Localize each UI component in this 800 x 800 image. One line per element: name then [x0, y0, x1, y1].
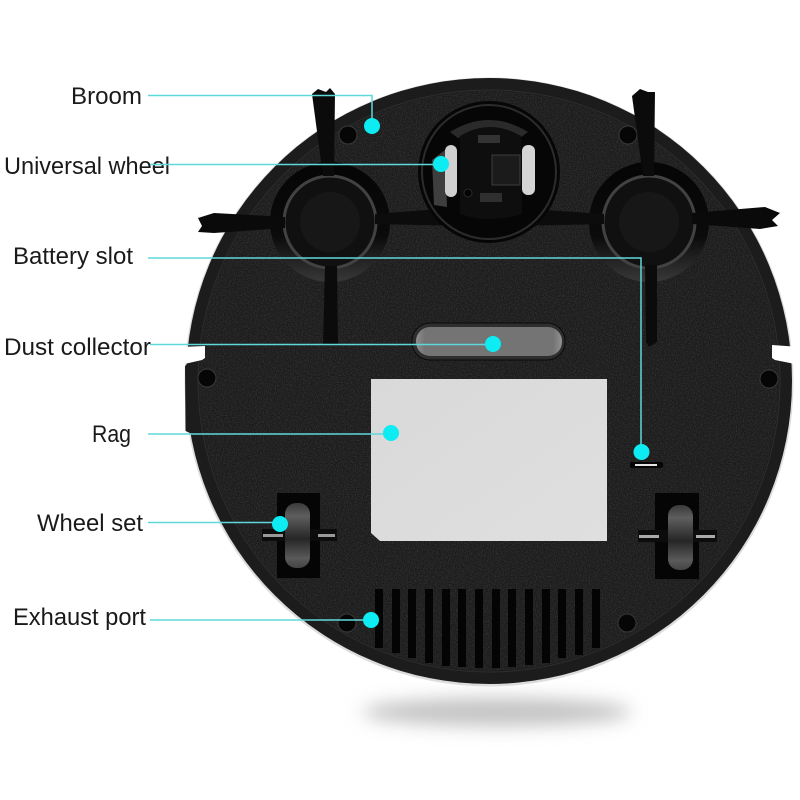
right side brush [505, 89, 780, 347]
label: Dust collector [4, 334, 501, 361]
label: Battery slot: Battery slot [13, 243, 133, 270]
label: Rag [92, 421, 399, 448]
right wheel [638, 493, 717, 579]
side notch: right [772, 345, 800, 365]
label: Broom [71, 83, 380, 134]
side bump: left [185, 362, 198, 434]
label: Exhaust port: Exhaust port [13, 604, 146, 631]
left side brush [198, 88, 465, 345]
label: Broom: Broom [71, 83, 142, 110]
side notch: left [180, 346, 205, 365]
robot body [180, 78, 800, 690]
battery slot [630, 462, 663, 468]
label: Wheel set: Wheel set [37, 510, 143, 537]
exhaust port vents [375, 589, 600, 668]
left wheel [262, 493, 337, 578]
dust collector window [412, 323, 565, 360]
ground shadow [362, 698, 632, 726]
rag panel [371, 379, 607, 541]
label: Exhaust port [13, 604, 379, 631]
label: Wheel set [37, 510, 288, 537]
universal wheel housing [418, 101, 560, 243]
label: Battery slot [13, 243, 650, 460]
label: Rag: Rag [92, 421, 131, 448]
label: Universal wheel [4, 153, 449, 180]
screw holes [198, 126, 778, 632]
label: Universal wheel: Universal wheel [4, 153, 170, 180]
label: Dust collector: Dust collector [4, 334, 151, 361]
